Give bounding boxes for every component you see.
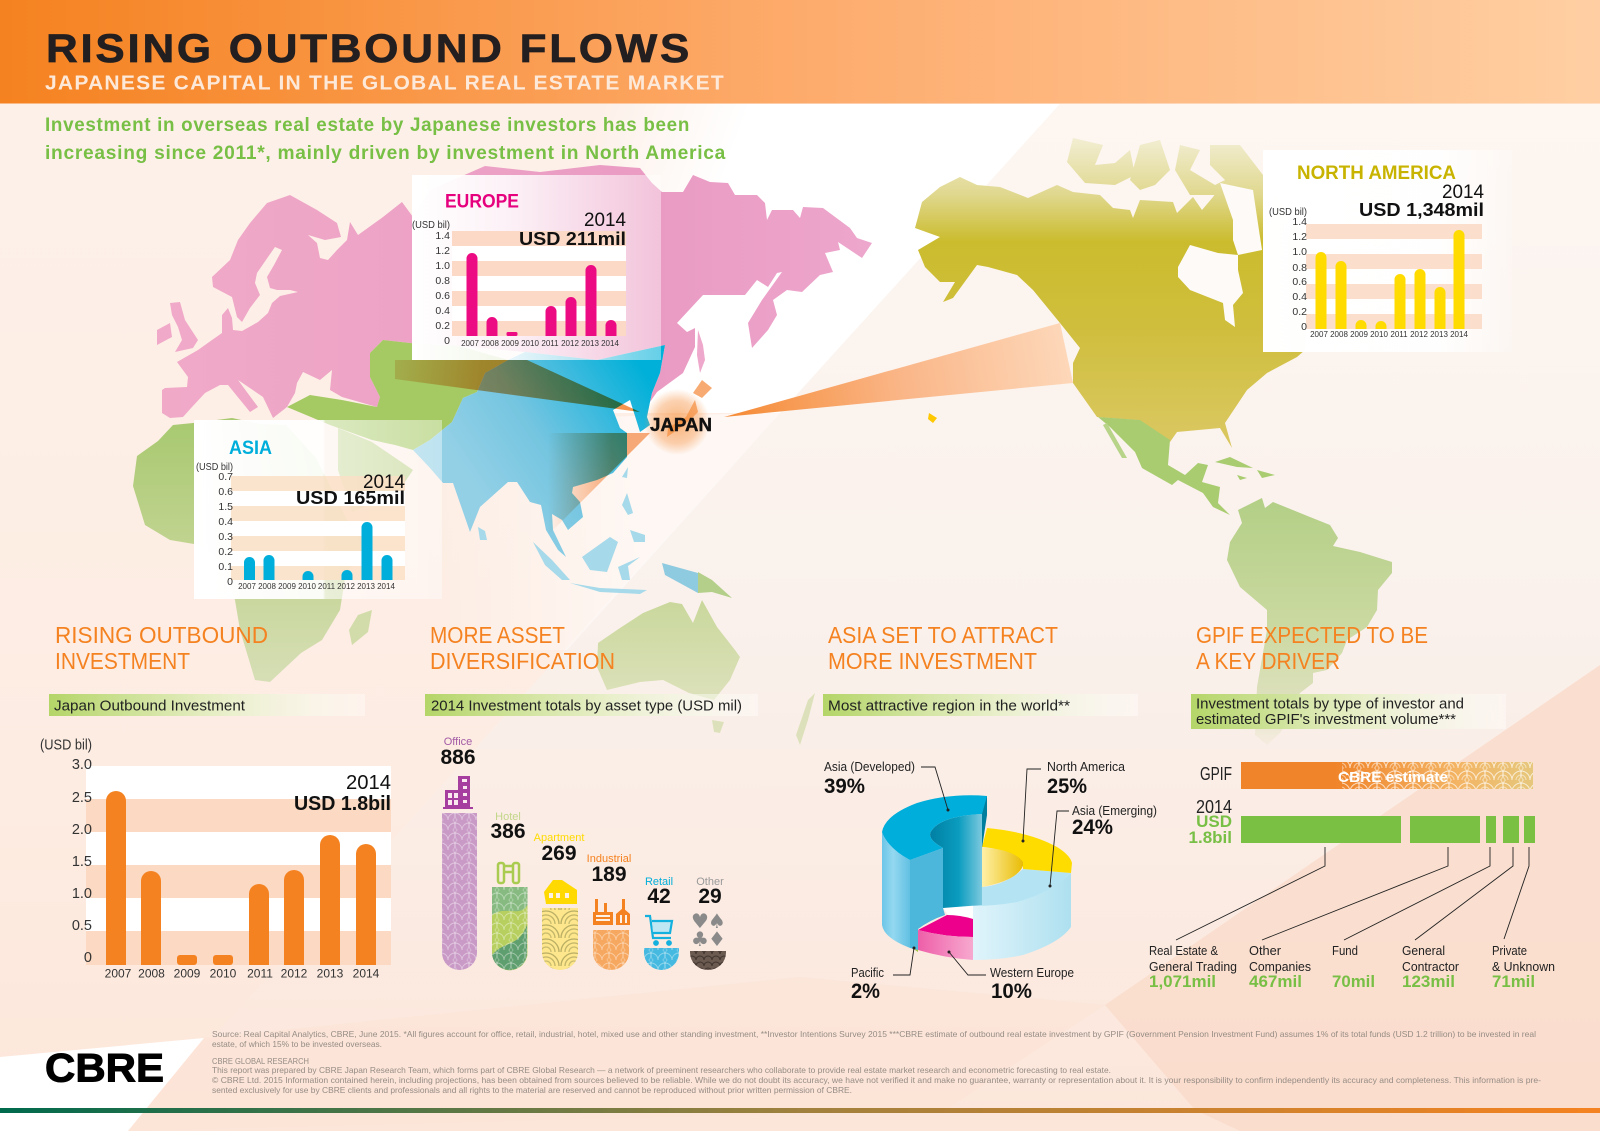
column: office [440,736,477,970]
column: office: 886 [440,746,476,769]
North America years: 2014 [1450,330,1468,339]
icon: card suits: ♥ [691,909,709,933]
North America axis labels: (USD bil) [1269,206,1307,218]
label: North America [1047,759,1126,798]
segment: Asia Developed [882,795,987,950]
intro text: increasing since 2011*, mainly driven by investment in North America [45,143,726,164]
year labels: 2013 [317,966,344,980]
Europe years: 2009 [501,339,519,348]
heading: DIVERSIFICATION [430,648,615,674]
total callout: USD 1.8bil [294,793,391,815]
subheading bar: estimated GPIF's investment volume*** [1196,711,1456,728]
heading: INVESTMENT [55,648,190,674]
panel: rising outbound investment [40,622,391,980]
intro text: Investment in overseas real estate by Japanese investors has been [45,115,690,136]
subtitle: JAPANESE CAPITAL IN THE GLOBAL REAL ESTATE MARKET [45,72,725,94]
North America axis labels: 0.4 [1292,291,1307,303]
Europe axis labels: 0.4 [435,305,450,317]
Europe total: USD 211mil [519,229,626,249]
island: Japan [667,380,712,437]
label: North America: North America [1047,759,1126,774]
3D donut chart [824,759,1157,1003]
continent: Central Asia and Middle East [287,340,508,512]
Asia axis labels: 0.6 [218,486,233,498]
arrow: Japan to North America [724,323,1073,417]
heading [828,622,1058,674]
bar chart [40,738,391,980]
Asia axis labels: 0.1 [218,561,233,573]
column: retail [644,876,679,970]
Europe years [461,339,619,348]
North America total [1359,182,1484,220]
leader lines [1176,847,1529,940]
source footnote: estate, of which 15% to be invested overseas. [212,1039,382,1049]
axis labels: 3.0 [72,757,92,773]
2014 investor bar: 1.8bil [1189,828,1232,847]
heading: North America: NORTH AMERICA [1297,163,1456,184]
North America years: 2008 [1330,330,1348,339]
North America years [1310,330,1468,339]
North America axis labels: 0.6 [1292,276,1307,288]
subheading bar [1191,694,1506,729]
Europe years: 2014 [601,339,619,348]
Europe axis labels: 0.8 [435,275,450,287]
segment: North America [982,828,1072,887]
Europe years: 2011 [541,339,559,348]
Asia axis labels: 0.7 [218,471,233,483]
islands: Southeast Asia [478,467,698,594]
heading: Europe: EUROPE [445,192,519,212]
Asia years: 2011 [318,582,336,591]
axis labels: 2.0 [72,822,92,838]
column: retail: Retail [645,876,673,888]
total callout [294,771,391,815]
label: Western Europe: Western Europe [990,965,1074,980]
North America axis labels [1269,206,1307,333]
investor amounts [1149,972,1535,991]
research disclaimer: sented exclusively for use by CBRE clients and professionals and all rights to the material are reserved and cannot be reproduced without prior written permission of CBRE. [212,1085,852,1095]
world map [133,138,1392,745]
North America axis labels: 0 [1301,321,1307,333]
label: Asia Developed: Asia (Developed) [824,759,915,774]
North America years: 2013 [1430,330,1448,339]
Asia years: 2012 [337,582,355,591]
year labels: 2011 [247,966,273,980]
Asia axis labels: 0.4 [218,516,233,528]
Europe axis labels: 0.2 [435,320,450,332]
island: Papua [698,572,732,598]
research disclaimer: © CBRE Ltd. 2015 Information contained herein, including projections, has been obtained from sources believed to be reliable. While we do not doubt its accuracy, we have not verified it and make no guarantee, warranty or representation about it. It is your responsibility to confirm independently its accuracy and completeness. This information is pre- [212,1075,1541,1085]
investor labels: Companies [1249,959,1311,974]
icon: shopping cart [645,916,672,945]
investor amounts: 467mil [1249,972,1302,991]
total callout: 2014 [346,771,391,794]
subheading bar: Japan Outbound Investment [54,698,246,714]
North America axis labels: 0.2 [1292,306,1307,318]
Asia years: 2013 [357,582,375,591]
label: Western Europe [990,965,1074,1003]
North America total: 2014 [1442,182,1484,203]
continent: South America [1227,498,1392,745]
leader dots [912,808,1052,954]
logo: CBRE: CBRE [45,1046,164,1090]
axis labels [40,738,92,966]
Europe axis labels: 1.2 [435,245,450,257]
investor labels: General Trading [1149,959,1237,974]
GPIF estimate bar [1200,762,1533,789]
Asia axis labels: 0 [227,576,233,588]
segment: Asia Emerging [973,869,1071,960]
Asia years: 2007 [238,582,256,591]
subheading bar: 2014 Investment totals by asset type (USD mil) [431,698,742,714]
Asia years: 2008 [258,582,276,591]
continent: Central America [1098,417,1275,515]
2014 investor bar [1189,797,1535,847]
header band [0,0,1600,104]
investor labels: General [1402,943,1445,958]
North America years: 2009 [1350,330,1368,339]
icon: office building [443,776,473,809]
North America axis labels: 1.4 [1292,216,1307,228]
heading: MORE INVESTMENT [828,648,1037,674]
Europe years: 2007 [461,339,479,348]
column: industrial: Industrial [587,853,631,865]
year labels: 2014 [353,966,380,980]
column: apartment [534,832,584,970]
column: apartment: 269 [541,842,577,865]
North America axis labels: 1.2 [1292,231,1307,243]
investor labels: Other [1249,943,1282,958]
axis labels: 1.0 [72,886,92,902]
heading: MORE ASSET [430,622,565,648]
research disclaimer: This report was prepared by CBRE Japan Research Team, which forms part of CBRE Global Research — a network of preeminent researchers who collaborate to provide real estate market research and econometric forecasting to real estate. [212,1065,1111,1075]
Asia years: 2014 [377,582,395,591]
column: hotel: Hotel [495,811,521,823]
North America axis labels: 1.0 [1292,246,1307,258]
Asia total [296,472,405,508]
segment: Pacific [910,941,918,952]
label: Asia Emerging: Asia (Emerging) [1072,803,1157,818]
2014 investor bar: USD [1196,812,1232,831]
title: RISING OUTBOUND FLOWS [46,27,692,71]
panel: GPIF expected to be a key driver [1149,622,1555,991]
axis labels: (USD bil) [40,738,92,754]
Japan glow [644,389,710,455]
research disclaimer [212,1056,1541,1095]
GPIF estimate bar: CBRE estimate [1338,769,1448,786]
label: Pacific [851,965,884,1003]
axis labels: 0 [84,950,92,966]
footer rule [0,1108,1600,1113]
column: industrial: 189 [591,863,627,886]
leader lines [893,767,1069,975]
Europe axis labels: 1.0 [435,260,450,272]
Europe total: 2014 [584,210,626,231]
panel: more asset diversification [425,622,758,970]
Europe axis labels: (USD bil) [412,219,450,231]
Asia years [238,582,395,591]
Europe axis labels: 1.4 [435,230,450,242]
continent: North America [915,138,1310,448]
icon: card suits: ♦ [708,927,726,951]
Europe years: 2010 [521,339,539,348]
island: Madagascar [349,610,372,645]
continent: East and South Asia [413,345,665,557]
axis labels: 1.5 [72,854,92,870]
year labels [105,966,380,980]
label: Western Europe: 10% [991,980,1032,1003]
investor amounts: 71mil [1492,972,1535,991]
Asia axis labels [196,461,233,588]
icon: factory [593,899,630,925]
heading: RISING OUTBOUND [55,622,268,648]
2014 investor bar: 2014 [1196,797,1232,817]
source footnote: Source: Real Capital Analytics, CBRE, June 2015. *All figures account for office, retail, industrial, hotel, mixed use and other standing investment, **Investor Intentions Survey 2015 ***CBRE estimate of outbound real estate investment by GPIF (Government Pension Investment Fund) assumes 1% of its total funds (USD 1.2 trillion) to be invested in real [212,1029,1536,1039]
island: Hawaii [928,413,937,423]
intro text [45,115,726,164]
subheading bar [823,694,1138,716]
heading: A KEY DRIVER [1196,648,1340,674]
column: hotel: 386 [490,820,526,843]
investor amounts: 123mil [1402,972,1455,991]
icon: card suits: ♠ [708,909,726,933]
investor labels: Fund [1332,943,1358,958]
Europe years: 2013 [581,339,599,348]
North America axis labels: 0.8 [1292,262,1307,274]
investor labels: & Unknown [1492,959,1555,974]
North America years: 2011 [1390,330,1408,339]
Japan label: JAPAN [650,415,712,435]
research disclaimer: CBRE GLOBAL RESEARCH [212,1056,309,1066]
icon: card suits [691,909,726,951]
subheading bar: Most attractive region in the world** [828,698,1070,714]
Asia years: 2010 [298,582,316,591]
investor amounts: 70mil [1332,972,1375,991]
Europe axis labels [412,219,450,347]
column: other [690,876,726,970]
continent: Europe and Russia [157,165,872,418]
panel: Europe [412,175,661,360]
Europe axis labels: 0.6 [435,290,450,302]
heading [1196,622,1428,674]
heading [55,622,268,674]
investor labels: Contractor [1402,959,1460,974]
Europe bars [466,253,616,336]
North America years: 2012 [1410,330,1428,339]
arrow: Japan to Europe [395,360,640,412]
investor labels: Real Estate & [1149,943,1218,958]
panel: North America [1263,150,1512,352]
axis labels: 2.5 [72,790,92,806]
Europe years: 2012 [561,339,579,348]
axis labels: 0.5 [72,918,92,934]
label: Asia Emerging: 24% [1072,816,1113,839]
heading: Asia: ASIA [229,438,272,459]
icon: apartment house [544,880,577,904]
column: apartment: Apartment [534,832,584,844]
panel: Asia set to attract more investment [823,622,1157,1003]
centre hole [943,905,973,919]
Europe axis labels: 0 [444,335,450,347]
North America years: 2010 [1370,330,1388,339]
heading: ASIA SET TO ATTRACT [828,622,1058,648]
icon: card suits: ♣ [691,927,709,951]
column: retail: 42 [647,885,671,908]
Asia total: USD 165mil [296,488,405,508]
label: Pacific: 2% [851,980,880,1003]
label: Asia Developed: 39% [824,775,865,798]
segment: Western Europe [918,915,973,960]
Asia axis labels: 0.2 [218,546,233,558]
column: industrial [587,853,631,970]
Asia axis labels: 1.5 [218,501,233,513]
Asia total: 2014 [363,472,405,493]
Europe years: 2008 [481,339,499,348]
bars [106,791,376,965]
investor amounts: 1,071mil [1149,972,1216,991]
continent: Australia [597,600,740,700]
North America years: 2007 [1310,330,1328,339]
GPIF estimate bar: GPIF [1200,764,1232,784]
Asia bars [244,522,392,580]
year labels: 2008 [138,966,165,980]
year labels: 2010 [210,966,237,980]
label: Asia Emerging [1072,803,1157,839]
island: Tasmania and New Zealand [712,693,815,745]
year labels: 2012 [281,966,308,980]
investor labels [1149,943,1555,974]
Asia axis labels: (USD bil) [196,461,233,473]
continent: Africa [133,418,372,682]
icon: hotel [498,863,519,883]
Asia axis labels: 0.3 [218,531,233,543]
North America total: USD 1,348mil [1359,200,1484,220]
Europe total [519,210,626,249]
label: Pacific: Pacific [851,965,884,980]
Hudson Bay [1178,245,1243,327]
Asia years: 2009 [278,582,296,591]
label: Asia Developed [824,759,915,798]
source footnote [212,1029,1536,1049]
label: North America: 25% [1047,775,1087,798]
subheading bar [49,694,365,716]
North America bars [1316,230,1464,329]
column: office: Office [444,736,472,748]
year labels: 2007 [105,966,132,980]
column: other: 29 [698,885,722,908]
column: hotel [490,811,528,970]
heading [430,622,615,674]
arrow: Japan to Asia [545,433,650,538]
column: other: Other [696,876,724,888]
subheading bar: Investment totals by type of investor and [1196,696,1464,713]
investor labels: Private [1492,943,1527,958]
year labels: 2009 [174,966,201,980]
panel: Asia [194,420,442,599]
heading: GPIF EXPECTED TO BE [1196,622,1428,648]
